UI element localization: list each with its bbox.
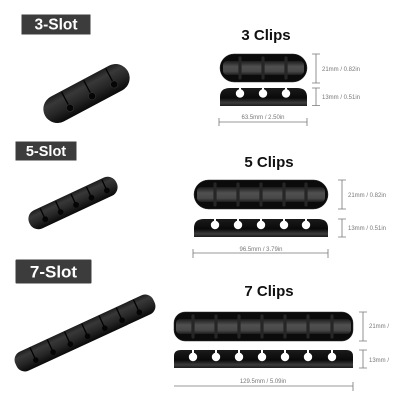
top view: 3 clips: [220, 54, 307, 82]
top view: 7 clips: [174, 312, 353, 341]
product: 7-slot clip: [12, 292, 158, 374]
heading: 5 Clips: 5 Clips: [244, 154, 294, 171]
label: 5-Slot: 5-Slot: [26, 144, 66, 160]
heading: 7 Clips: 7 Clips: [244, 283, 294, 300]
dimensions: 7 clips: [174, 312, 407, 391]
dimensions: 5 clips: [193, 180, 386, 258]
product: 5-slot clip: [25, 174, 121, 232]
dimensions: 7 clips: 21mm / 0.82in: [369, 324, 407, 330]
side view: 5 clips: [194, 218, 328, 237]
label: 3-Slot: 3-Slot: [34, 16, 78, 34]
label: 3-Slot: [22, 14, 90, 34]
label: 5-Slot: [16, 142, 76, 160]
label: 7-Slot: [16, 260, 92, 284]
product: 3-slot clip: [38, 59, 135, 128]
dimensions: 5 clips: 13mm / 0.51in: [348, 226, 386, 232]
dimensions: 7 clips: 129.5mm / 5.09in: [240, 379, 286, 385]
dimensions: 3 clips: 21mm / 0.82in: [322, 67, 360, 73]
label: 7-Slot: 7-Slot: [30, 262, 77, 282]
top view: 5 clips: [194, 180, 328, 209]
heading: 3 Clips: 3 Clips: [241, 27, 291, 44]
side view: 7 clips: [174, 350, 353, 368]
side view: 3 clips: [220, 87, 307, 106]
dimensions: 5 clips: 96.5mm / 3.79in: [239, 247, 283, 253]
dimensions: 3 clips: [219, 54, 360, 126]
dimensions: 3 clips: 13mm / 0.51in: [322, 95, 360, 101]
dimensions: 7 clips: 13mm / 0.51in: [369, 358, 407, 364]
dimensions: 3 clips: 63.5mm / 2.50in: [241, 115, 285, 121]
dimensions: 5 clips: 21mm / 0.82in: [348, 193, 386, 199]
